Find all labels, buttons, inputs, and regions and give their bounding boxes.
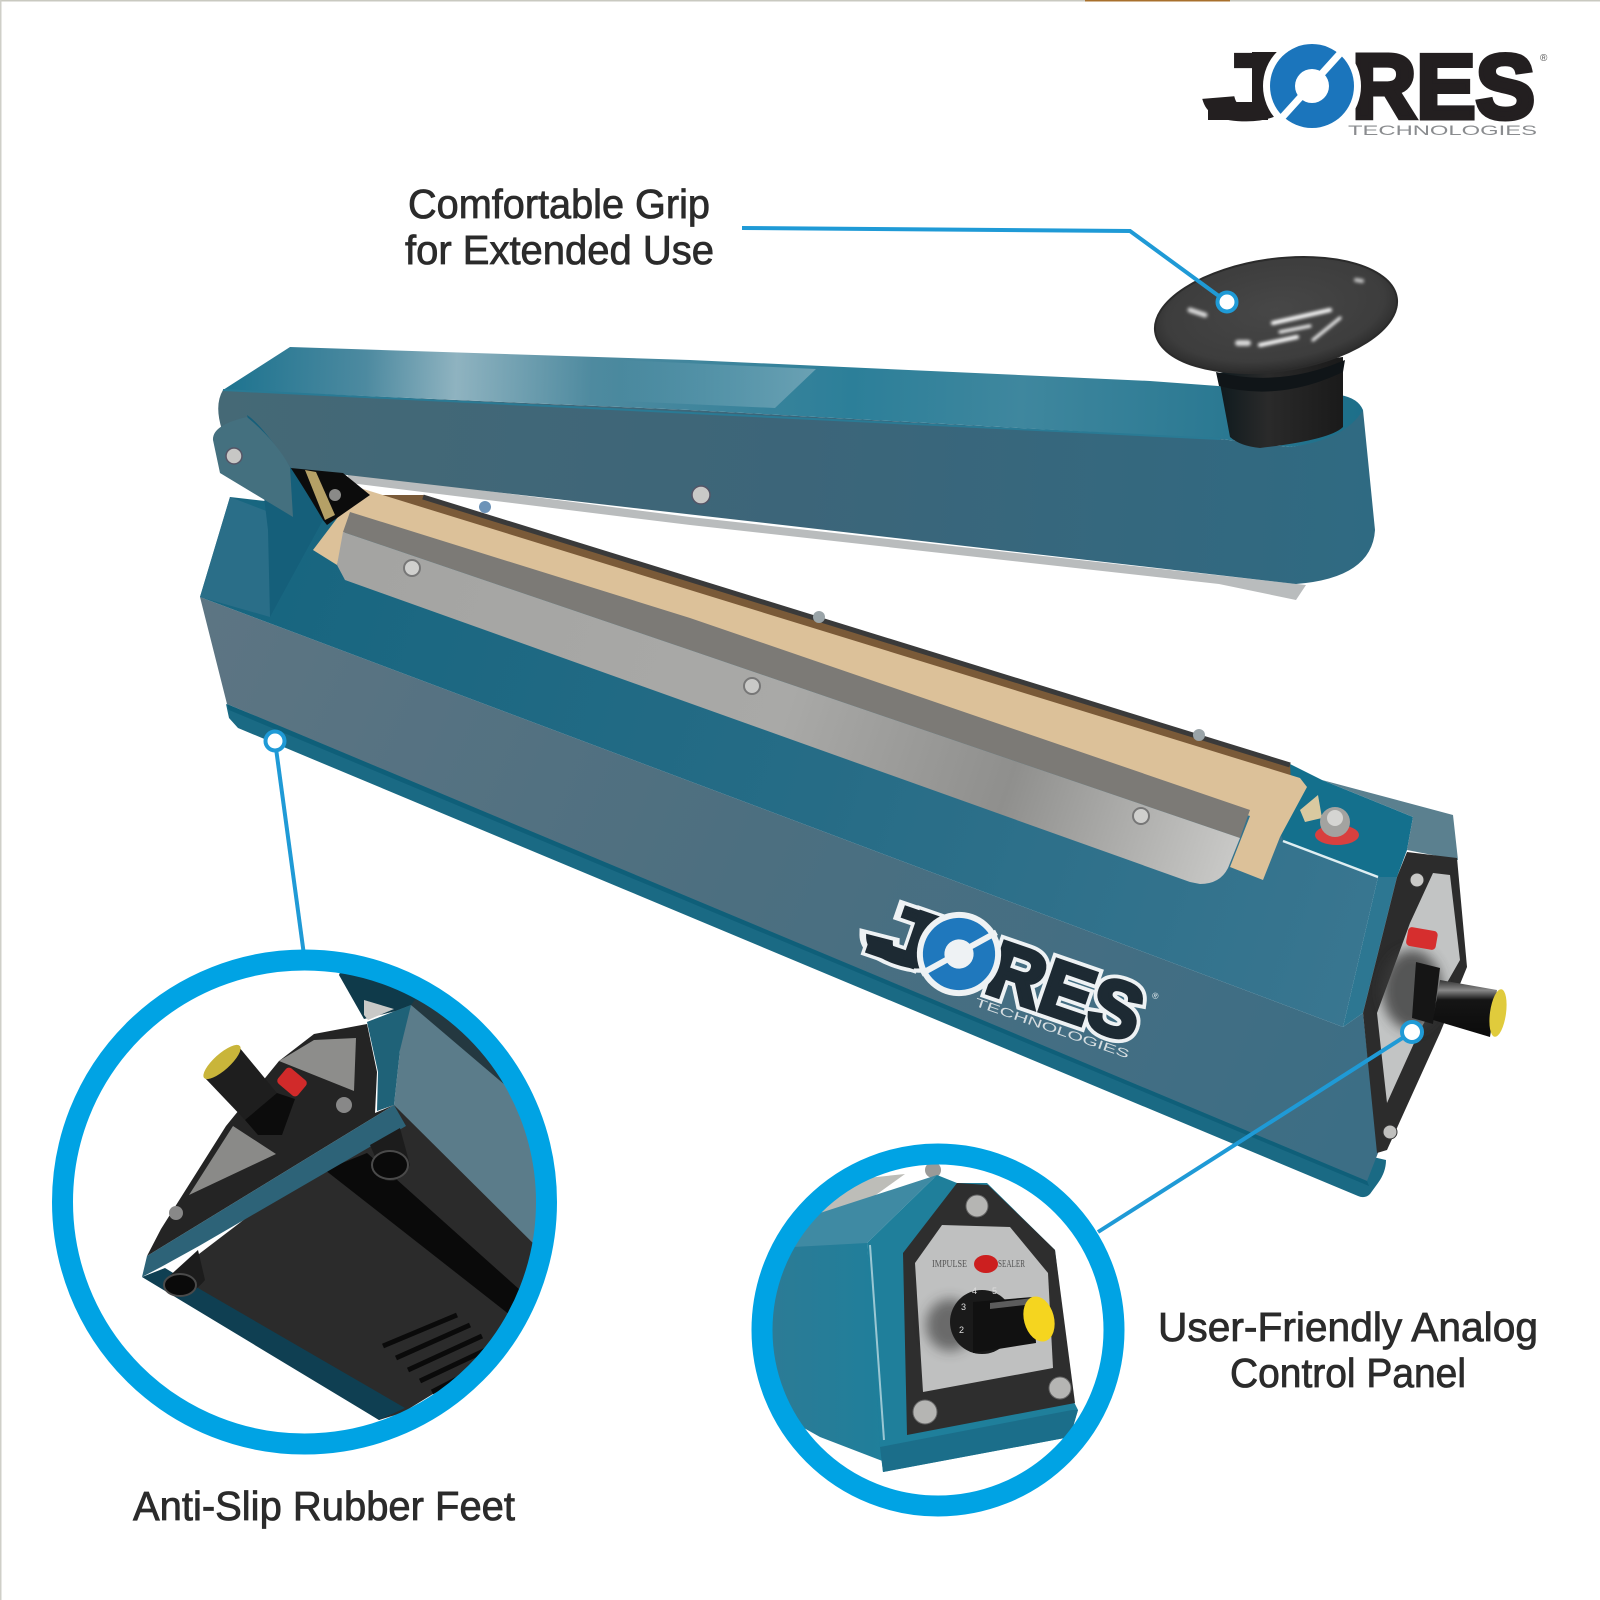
body logo: RES xyxy=(977,924,1154,1059)
detail circle: rubber feet xyxy=(62,960,560,1444)
dial and knob: 5 xyxy=(992,1286,997,1296)
panel text: SEALER xyxy=(998,1258,1025,1270)
teal side xyxy=(367,1005,536,1242)
label: control panel: User-Friendly Analog xyxy=(1158,1304,1538,1350)
body logo: TECHNOLOGIES xyxy=(973,995,1131,1061)
dial and knob: 2 xyxy=(959,1325,964,1335)
callout line: grip xyxy=(742,228,1236,312)
base plate xyxy=(880,1410,1078,1472)
clip pins xyxy=(479,501,1205,741)
heat tape xyxy=(313,488,1307,880)
panel text: IMPULSE xyxy=(932,1258,967,1270)
red switch xyxy=(277,1068,307,1096)
black panel xyxy=(903,1183,1075,1435)
vents xyxy=(383,1315,490,1392)
knob xyxy=(1412,962,1509,1038)
label: control panel xyxy=(1158,1304,1538,1396)
logo: Jores Technologies: TECHNOLOGIES xyxy=(1348,122,1537,138)
control plate xyxy=(147,1024,394,1256)
dial and knob: 3 xyxy=(961,1302,966,1312)
teal rim xyxy=(142,1105,406,1277)
underside xyxy=(197,1105,532,1420)
label: anti-slip rubber feet: Anti-Slip Rubber Feet xyxy=(133,1483,516,1529)
front face xyxy=(867,1175,1078,1472)
control panel end face xyxy=(1363,852,1509,1153)
dial and knob xyxy=(926,1286,1059,1354)
label: comfortable grip: Comfortable Grip xyxy=(408,181,710,227)
body logo: J xyxy=(857,883,959,991)
upper arm xyxy=(218,347,1375,584)
body logo: ® xyxy=(1151,990,1161,1002)
impulse sealer product xyxy=(200,243,1509,1197)
logo: Jores Technologies: ® xyxy=(1540,53,1548,64)
knob xyxy=(199,1040,295,1135)
body logo: J xyxy=(857,883,959,991)
body logo: RES xyxy=(977,924,1154,1059)
label: comfortable grip xyxy=(405,181,714,273)
terminal nut xyxy=(1300,795,1359,845)
hinge bracket xyxy=(213,415,370,617)
detail circle: control panel xyxy=(745,1154,1114,1506)
label: comfortable grip: for Extended Use xyxy=(405,227,714,273)
rubber foot xyxy=(370,1128,410,1181)
logo: Jores Technologies: J xyxy=(1205,37,1295,138)
sealer base xyxy=(200,495,1458,1197)
callout line: feet xyxy=(266,732,304,955)
body side xyxy=(772,1243,882,1461)
body logo xyxy=(857,883,1165,1064)
rubber foot xyxy=(164,1250,205,1296)
logo: Jores Technologies: RES xyxy=(1352,37,1535,138)
lower jaw strip xyxy=(347,473,1306,600)
metal shield xyxy=(337,512,1250,884)
dial and knob: 4 xyxy=(972,1286,977,1296)
screws xyxy=(913,1195,1071,1424)
panel text xyxy=(932,1260,1025,1267)
label: control panel: Control Panel xyxy=(1230,1350,1466,1396)
red switch xyxy=(974,1255,998,1273)
callout line: control panel xyxy=(1098,1022,1422,1232)
sealing channel xyxy=(360,495,1292,800)
grip handle xyxy=(1147,243,1405,448)
logo: Jores Technologies xyxy=(1205,37,1548,138)
